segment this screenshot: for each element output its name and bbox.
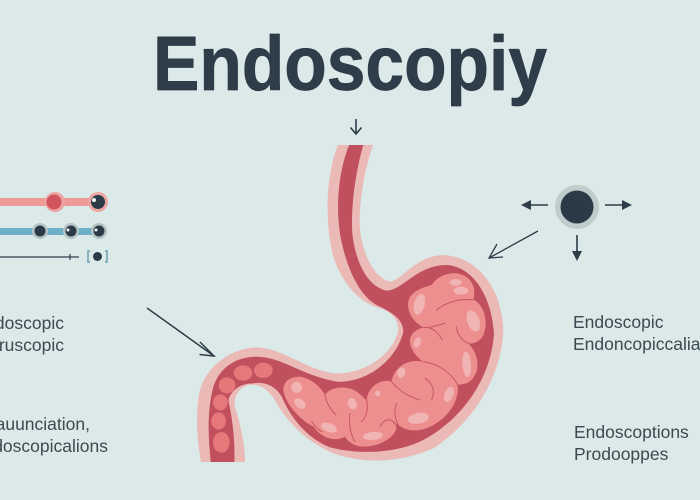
right text block lower: Prodooppes — [574, 444, 669, 464]
arrow: pointing to duodenum — [147, 308, 214, 356]
right text block upper — [573, 312, 700, 354]
stomach illustration — [197, 145, 503, 462]
left text block upper — [0, 313, 64, 355]
legend: device diagrams — [0, 192, 108, 262]
right text block upper: Endoscopic — [573, 312, 664, 332]
left text block upper: ruscopic — [0, 335, 64, 355]
right text block lower — [574, 422, 689, 464]
duodenum nodules — [211, 363, 273, 453]
scope lens icon with arrows — [521, 185, 632, 261]
fold creases — [312, 300, 473, 442]
thin scale line with bracket icon — [0, 251, 107, 262]
stomach inner lining — [209, 145, 494, 462]
gastric folds — [283, 273, 486, 447]
fold highlights — [291, 279, 483, 441]
arrow: pointing to stomach top — [489, 231, 538, 258]
right text block upper: Endoncopiccalia — [573, 334, 700, 354]
blue scope bar — [0, 223, 107, 239]
stomach outer wall — [197, 145, 503, 462]
title: Endoscopiy — [153, 21, 547, 107]
arrow: top entry — [350, 119, 362, 134]
left text block lower — [0, 414, 108, 456]
right text block lower: Endoscoptions — [574, 422, 689, 442]
salmon scope bar — [0, 192, 108, 212]
